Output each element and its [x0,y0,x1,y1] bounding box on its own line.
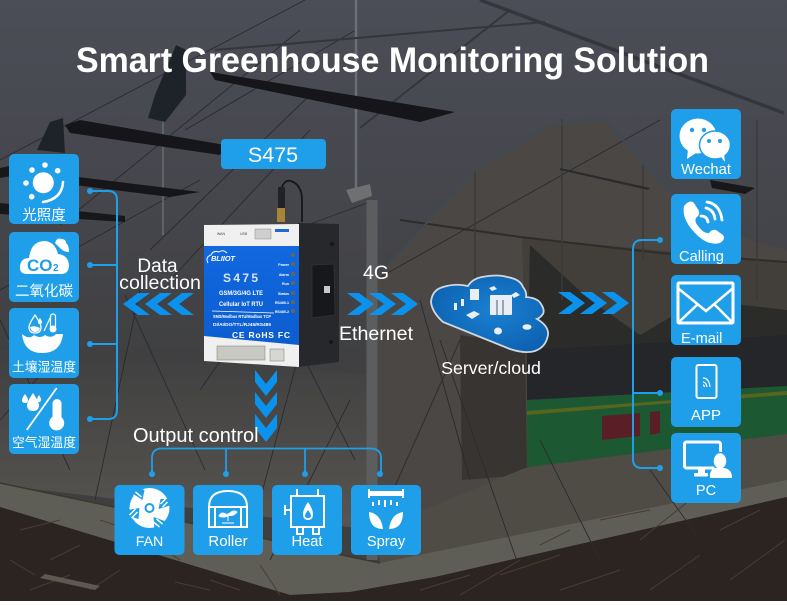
device logo [207,251,236,263]
device: S475 RTU: GSM/3G/4G LTE [219,290,263,297]
arrows: to cloud [347,293,418,315]
icon: fan [128,488,172,530]
device LEDs: RS485-1 [275,301,289,305]
output tile: email [671,275,741,347]
sensor tile: soil humidity and temperature [9,308,79,378]
label: Server/cloud: Server/cloud [441,358,541,378]
sensor tile: CO2 [9,232,79,302]
label: S475: S475 [248,143,298,167]
device LEDs: Power [278,263,290,267]
connector: sensors bracket [87,188,117,422]
antenna [277,181,302,222]
sensor tile: CO2: 二氧化碳 [15,283,73,300]
output tile: fan [114,485,184,555]
output tile: calling: Calling [679,249,724,265]
sensor tile: air humidity and temperature [9,384,79,454]
device: S475 RTU: DI/AI/DO/TTL/RJ45/RS485 [213,322,271,328]
icon: wechat bubbles [680,118,730,162]
output tile: spray: Spray [367,534,406,550]
device: S475 RTU: USB [240,232,248,236]
icon: CO2 cloud: CO [27,256,52,275]
device LEDs: Alarm [279,273,289,277]
output tile: heat: Heat [291,534,323,550]
device LEDs [275,253,295,314]
icon: soil bowl with drop and thermometer [22,314,63,353]
label: Data collection [119,256,201,294]
device: S475 RTU: SMS/Modbus RTU/Modbus TCP [213,314,272,320]
output tile: wechat: Wechat [681,162,731,178]
output tile: pc: PC [696,483,716,499]
device: S475 RTU: Cellular IoT RTU [219,301,263,308]
icon: envelope [678,283,733,323]
label: 4G: 4G [363,262,389,284]
device: S475 RTU: CE RoHS FC [232,330,290,340]
icon: drops, slash and thermometer [22,388,64,430]
device bottom terminals [217,346,265,360]
output tile: fan: FAN [136,534,163,550]
icon: monitor and person [684,442,732,478]
output tile: roller [193,485,263,555]
icon: roller greenhouse [209,491,247,527]
device LEDs: Run [282,282,289,286]
sensor tile: light [9,154,79,224]
icon: smartphone [696,365,716,398]
label: Ethernet: Ethernet [339,323,414,345]
label: Data collection: Data [137,256,178,277]
device logo: BLIIOT [211,254,236,263]
output tile: email: E-mail [681,331,722,347]
device side panel [298,223,339,367]
output tile: calling [671,194,741,265]
device: S475 RTU [204,181,339,367]
connector: output bracket [149,448,383,477]
output tile: pc [671,433,741,503]
label: Data collection: collection [119,272,201,294]
arrows: to outputs on phone [558,292,629,314]
device top terminals [255,229,271,239]
icon: phone with signal [684,202,724,244]
device LEDs: Status [278,292,289,296]
sensor tile: air humidity and temperature: 空气湿温度 [12,435,76,450]
title: Smart Greenhouse Monitoring Solution [76,41,709,80]
output tile: heat [272,485,342,555]
device: S475 RTU: WAN [217,232,226,236]
icon: sun [23,162,63,202]
output tile: spray [351,485,421,555]
arrows: output control [255,370,277,442]
label: Output control: Output control [133,425,259,447]
output tile: app: APP [691,407,721,424]
grass streaks [10,500,785,595]
output tile: roller: Roller [208,533,248,550]
label: S475 [221,139,326,169]
icon: CO2 cloud: 2 [53,263,59,274]
device LEDs: RS485-2 [275,310,289,314]
output tile: app [671,357,741,427]
output tile: wechat [671,109,741,179]
arrows: data collection [123,293,194,315]
icon: CO2 cloud [20,238,69,275]
icon: server cloud [431,276,548,352]
sensor tile: light: 光照度 [22,207,66,224]
device face [204,224,299,367]
icon: spray and leaves [368,489,404,529]
device model text: S475 [223,271,258,285]
connector: notifications bracket [633,237,663,471]
sensor tile: soil humidity and temperature: 土壤湿温度 [12,360,76,374]
icon: heater with flame [285,489,324,534]
